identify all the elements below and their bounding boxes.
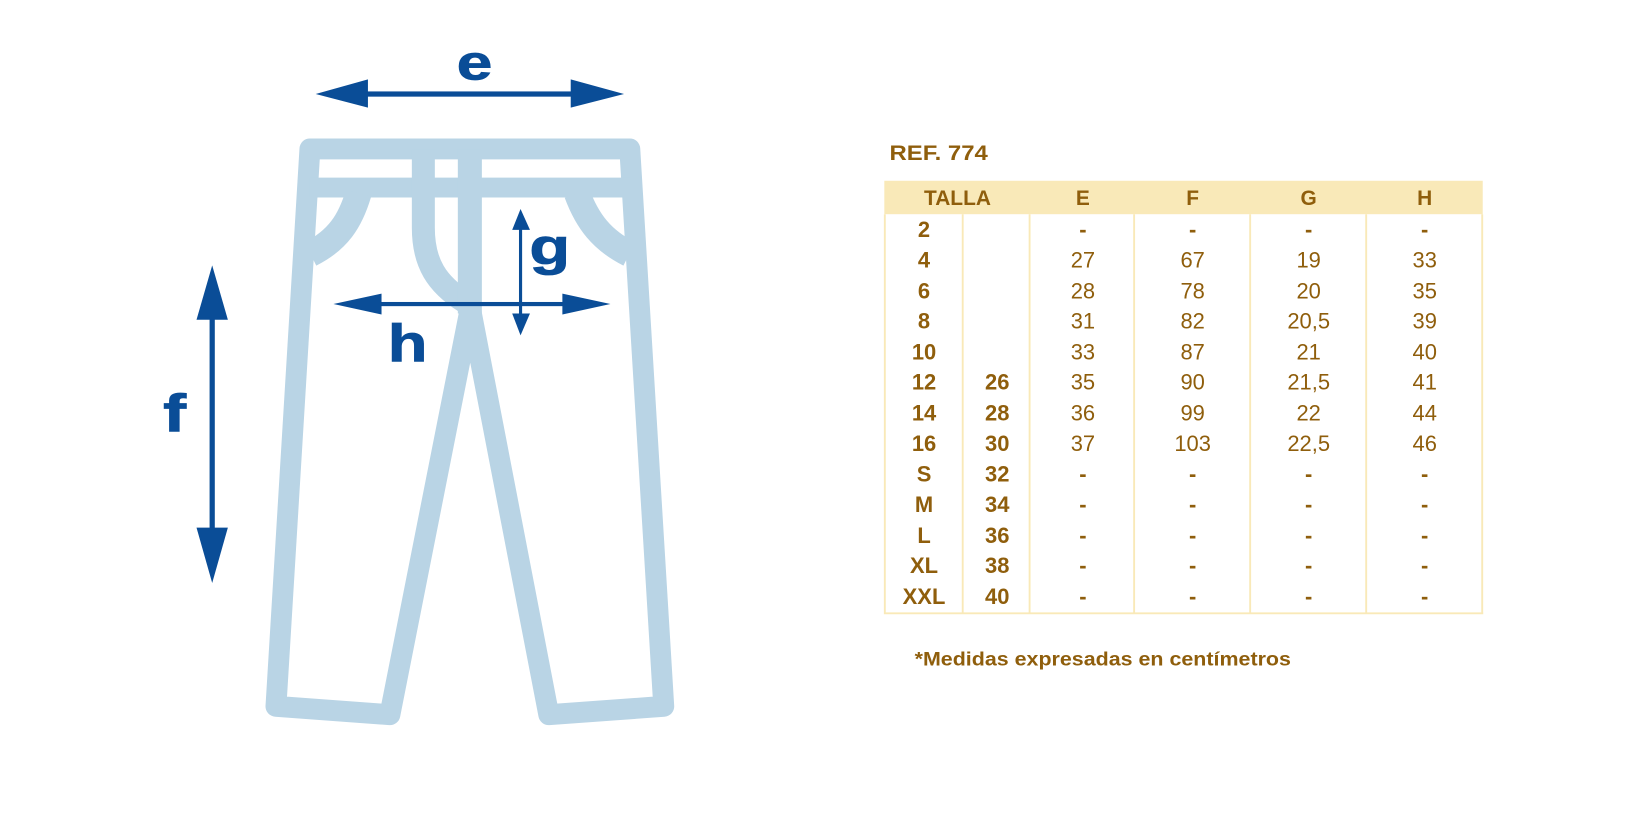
row: 4: 27 [1071,247,1095,272]
row: 16 / 30: 22,5 [1287,431,1330,456]
row: 4 [918,247,1437,272]
row: 16 / 30: 37 [1071,431,1095,456]
row: 12 / 26: 12 [912,370,936,395]
label: f: f [163,385,186,444]
row: XL / 38: - [1421,553,1428,578]
row: 16 / 30: 46 [1413,431,1437,456]
row: 8: 20,5 [1287,309,1330,334]
label: e: e [457,36,492,90]
table header: E [1076,187,1090,210]
row: S / 32 [917,462,1428,487]
row: 8: 39 [1413,309,1437,334]
row: 10 [912,339,1437,364]
row: S / 32: S [917,462,931,487]
row: L / 36: - [1421,523,1428,548]
arrow: f length [197,265,228,583]
row: 4: 19 [1296,247,1321,272]
row: 8 [918,309,1437,334]
row: L / 36: - [1305,523,1312,548]
row: M / 34: - [1305,492,1312,517]
row: 6: 20 [1296,278,1321,303]
row: 16 / 30: 103 [1174,431,1211,456]
row: S / 32: - [1189,462,1196,487]
table header: TALLA [924,187,991,210]
row: M / 34: - [1189,492,1196,517]
row: XL / 38: 38 [985,553,1009,578]
row: XL / 38: - [1079,553,1087,578]
row: XL / 38: - [1305,553,1312,578]
row: XXL / 40: XXL [903,584,945,609]
row: M / 34: M [915,492,933,517]
row: 8: 82 [1180,309,1205,334]
row: 10: 33 [1071,339,1095,364]
table header: H [1417,187,1432,210]
row: XXL / 40 [903,584,1428,609]
row: S / 32: - [1421,462,1428,487]
row: 6: 6 [918,278,930,303]
row: 6 [918,278,1437,303]
label: g: g [529,218,570,275]
row: 14 / 28: 28 [985,401,1009,426]
row: L / 36: 36 [985,523,1009,548]
row: 14 / 28 [912,401,1437,426]
row: 12 / 26: 35 [1071,370,1095,395]
row: S / 32: - [1305,462,1312,487]
table header: G [1301,187,1317,210]
row: 2: - [1421,217,1428,242]
label: h: h [388,315,428,374]
row: XXL / 40: - [1421,584,1428,609]
arrow: e waist width [316,79,624,108]
row: 12 / 26: 41 [1413,370,1437,395]
row: 8: 31 [1071,309,1095,334]
table header [884,181,1483,214]
row: 16 / 30: 30 [985,431,1009,456]
row: XL / 38 [910,553,1428,578]
row: 2: - [1305,217,1312,242]
row: 16 / 30 [912,431,1437,456]
row: 6: 35 [1413,278,1437,303]
row: XXL / 40: - [1079,584,1087,609]
row: 2: 2 [918,217,930,242]
row: 4: 33 [1413,247,1437,272]
row: 2: - [1189,217,1196,242]
heading: reference: REF. 774 [890,142,988,165]
row: M / 34: 34 [985,492,1010,517]
row: 14 / 28: 99 [1180,401,1205,426]
row: XL / 38: - [1189,553,1196,578]
row: 12 / 26 [912,370,1437,395]
row: 6: 28 [1071,278,1095,303]
row: L / 36: L [917,523,931,548]
row: 4: 67 [1180,247,1205,272]
row: 2 [918,217,1428,242]
row: 8: 8 [918,309,930,334]
row: 12 / 26: 26 [985,370,1009,395]
row: 6: 78 [1180,278,1205,303]
footnote: *Medidas expresadas en centímetros [915,649,1291,671]
row: M / 34: - [1421,492,1428,517]
row: 10: 21 [1296,339,1321,364]
row: 10: 87 [1180,339,1205,364]
row: 10: 40 [1413,339,1437,364]
arrow: g rise [512,209,530,335]
row: M / 34: - [1079,492,1087,517]
row: S / 32: - [1079,462,1087,487]
table header: F [1186,187,1199,210]
row: 2: - [1079,217,1087,242]
row: 16 / 30: 16 [912,431,936,456]
row: 14 / 28: 22 [1296,401,1321,426]
row: L / 36: - [1079,523,1087,548]
icon: trousers outline [276,149,664,715]
row: S / 32: 32 [985,462,1009,487]
row: 4: 4 [918,247,931,272]
row: L / 36 [917,523,1428,548]
row: XXL / 40: - [1189,584,1196,609]
row: L / 36: - [1189,523,1196,548]
row: 12 / 26: 90 [1180,370,1205,395]
row: 14 / 28: 44 [1413,401,1437,426]
table: size chart [884,181,1483,613]
row: 10: 10 [912,339,936,364]
row: XXL / 40: - [1305,584,1312,609]
arrow: h hip width [333,294,610,315]
row: 14 / 28: 14 [912,401,937,426]
row: 12 / 26: 21,5 [1287,370,1330,395]
row: 14 / 28: 36 [1071,401,1095,426]
row: XXL / 40: 40 [985,584,1009,609]
row: XL / 38: XL [910,553,938,578]
row: M / 34 [915,492,1428,517]
